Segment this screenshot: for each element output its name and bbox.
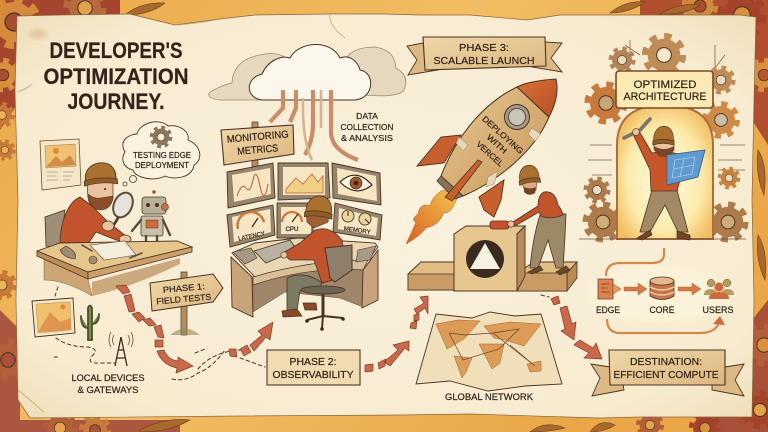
banner: phase 3 scalable launch xyxy=(407,37,562,75)
local devices: photo, cactus, tower xyxy=(32,287,133,366)
monitor: line chart xyxy=(227,163,275,208)
banner: destination efficient compute: EFFICIENT COMPUTE xyxy=(614,370,719,381)
sign: monitoring metrics xyxy=(221,122,294,167)
monitor: eye xyxy=(332,163,381,205)
path arrow: phase 1 to phase 2 xyxy=(116,285,273,380)
arch doorway xyxy=(617,105,713,239)
sign: monitoring metrics: METRICS xyxy=(237,143,279,158)
data collection label: COLLECTION xyxy=(340,122,394,132)
label plate: optimized architecture: ARCHITECTURE xyxy=(624,91,706,103)
path arrow: phase 2 to phase 3 xyxy=(365,296,428,372)
local devices label: & GATEWAYS xyxy=(78,385,138,395)
rocket label: DEPLOYING xyxy=(480,114,525,156)
title: OPTIMIZATION xyxy=(44,64,188,89)
box: phase 2 observability: PHASE 2: xyxy=(290,357,336,368)
box: phase 2 observability xyxy=(267,350,360,385)
launch platform with triangle button xyxy=(408,221,577,291)
label plate: optimized architecture: OPTIMIZED xyxy=(634,79,697,91)
gear cluster xyxy=(586,37,745,239)
sign: phase 1 field tests: PHASE 1: xyxy=(162,281,205,295)
global network map xyxy=(416,312,562,391)
control console xyxy=(231,238,378,317)
rocket porthole xyxy=(504,104,530,130)
banner: destination efficient compute: DESTINATION: xyxy=(630,357,702,368)
flow labels: EDGE xyxy=(596,305,620,316)
flow labels: USERS xyxy=(702,305,734,316)
rocket body xyxy=(441,87,549,196)
local devices label: LOCAL DEVICES xyxy=(72,373,144,383)
monitor: latency gauge xyxy=(227,205,275,247)
data collection label xyxy=(340,111,394,143)
bubble label xyxy=(133,150,191,170)
icon: core database xyxy=(650,277,674,300)
bubble label: TESTING EDGE xyxy=(133,150,191,160)
data collection label: & ANALYSIS xyxy=(341,133,393,143)
monitor: cpu gauge xyxy=(277,203,313,238)
title: JOURNEY. xyxy=(68,89,164,114)
flow labels: CORE xyxy=(650,305,674,316)
sign: phase 1 field tests: FIELD TESTS xyxy=(156,292,212,306)
rocket nose xyxy=(517,79,557,117)
cloud with data pipes xyxy=(209,44,406,160)
flow labels xyxy=(596,305,734,316)
path arrow: to destination xyxy=(541,295,602,359)
rocket label: WITH xyxy=(485,133,509,156)
local devices label xyxy=(72,373,144,395)
edge core users flow diagram xyxy=(588,248,734,333)
rocket flames xyxy=(406,190,458,244)
robot xyxy=(132,191,170,248)
architect with blueprint and wrench xyxy=(624,119,705,240)
desk xyxy=(37,241,192,296)
office chair xyxy=(301,286,345,331)
title: DEVELOPER'S xyxy=(50,38,182,63)
icon: gear xyxy=(152,128,170,146)
icon: triangle logo xyxy=(466,240,504,278)
title xyxy=(44,38,188,114)
banner: phase 3 scalable launch: SCALABLE LAUNCH xyxy=(434,56,534,67)
sign: phase 1 field tests xyxy=(150,272,223,335)
banner: destination efficient compute xyxy=(591,350,744,396)
icon: edge document xyxy=(598,279,621,299)
rocket label xyxy=(474,114,525,169)
monitor wall xyxy=(227,163,382,247)
thought bubble: testing edge deployment xyxy=(123,122,200,186)
monitor: cpu gauge: CPU xyxy=(285,226,299,233)
bubble label: DEPLOYMENT xyxy=(135,160,189,170)
rocket label: VERCEL xyxy=(474,140,505,169)
icon: users xyxy=(704,279,734,299)
rocket fins xyxy=(417,135,504,217)
optimized architecture arch xyxy=(579,37,746,240)
box: phase 2 observability: OBSERVABILITY xyxy=(272,370,354,381)
developer at desk with magnifier xyxy=(45,162,137,248)
developer at monitoring console xyxy=(281,195,352,317)
monitor: area chart xyxy=(278,163,330,200)
poster on wall xyxy=(40,139,81,190)
arrow: core to users xyxy=(678,283,701,295)
circuit traces xyxy=(588,40,745,175)
monitor: memory gauges xyxy=(333,203,382,240)
rocket xyxy=(406,79,557,244)
banner: phase 3 scalable launch: PHASE 3: xyxy=(459,43,509,54)
sign: monitoring metrics: MONITORING xyxy=(226,129,289,146)
global network label: GLOBAL NETWORK xyxy=(445,392,534,402)
monitor: latency gauge: LATENCY xyxy=(238,230,266,243)
monitor: memory gauges: MEMORY xyxy=(343,226,371,236)
label plate: optimized architecture xyxy=(616,71,713,108)
engineer pressing button xyxy=(508,164,570,275)
arrow: edge to core xyxy=(624,283,647,295)
data collection label: DATA xyxy=(356,111,378,121)
